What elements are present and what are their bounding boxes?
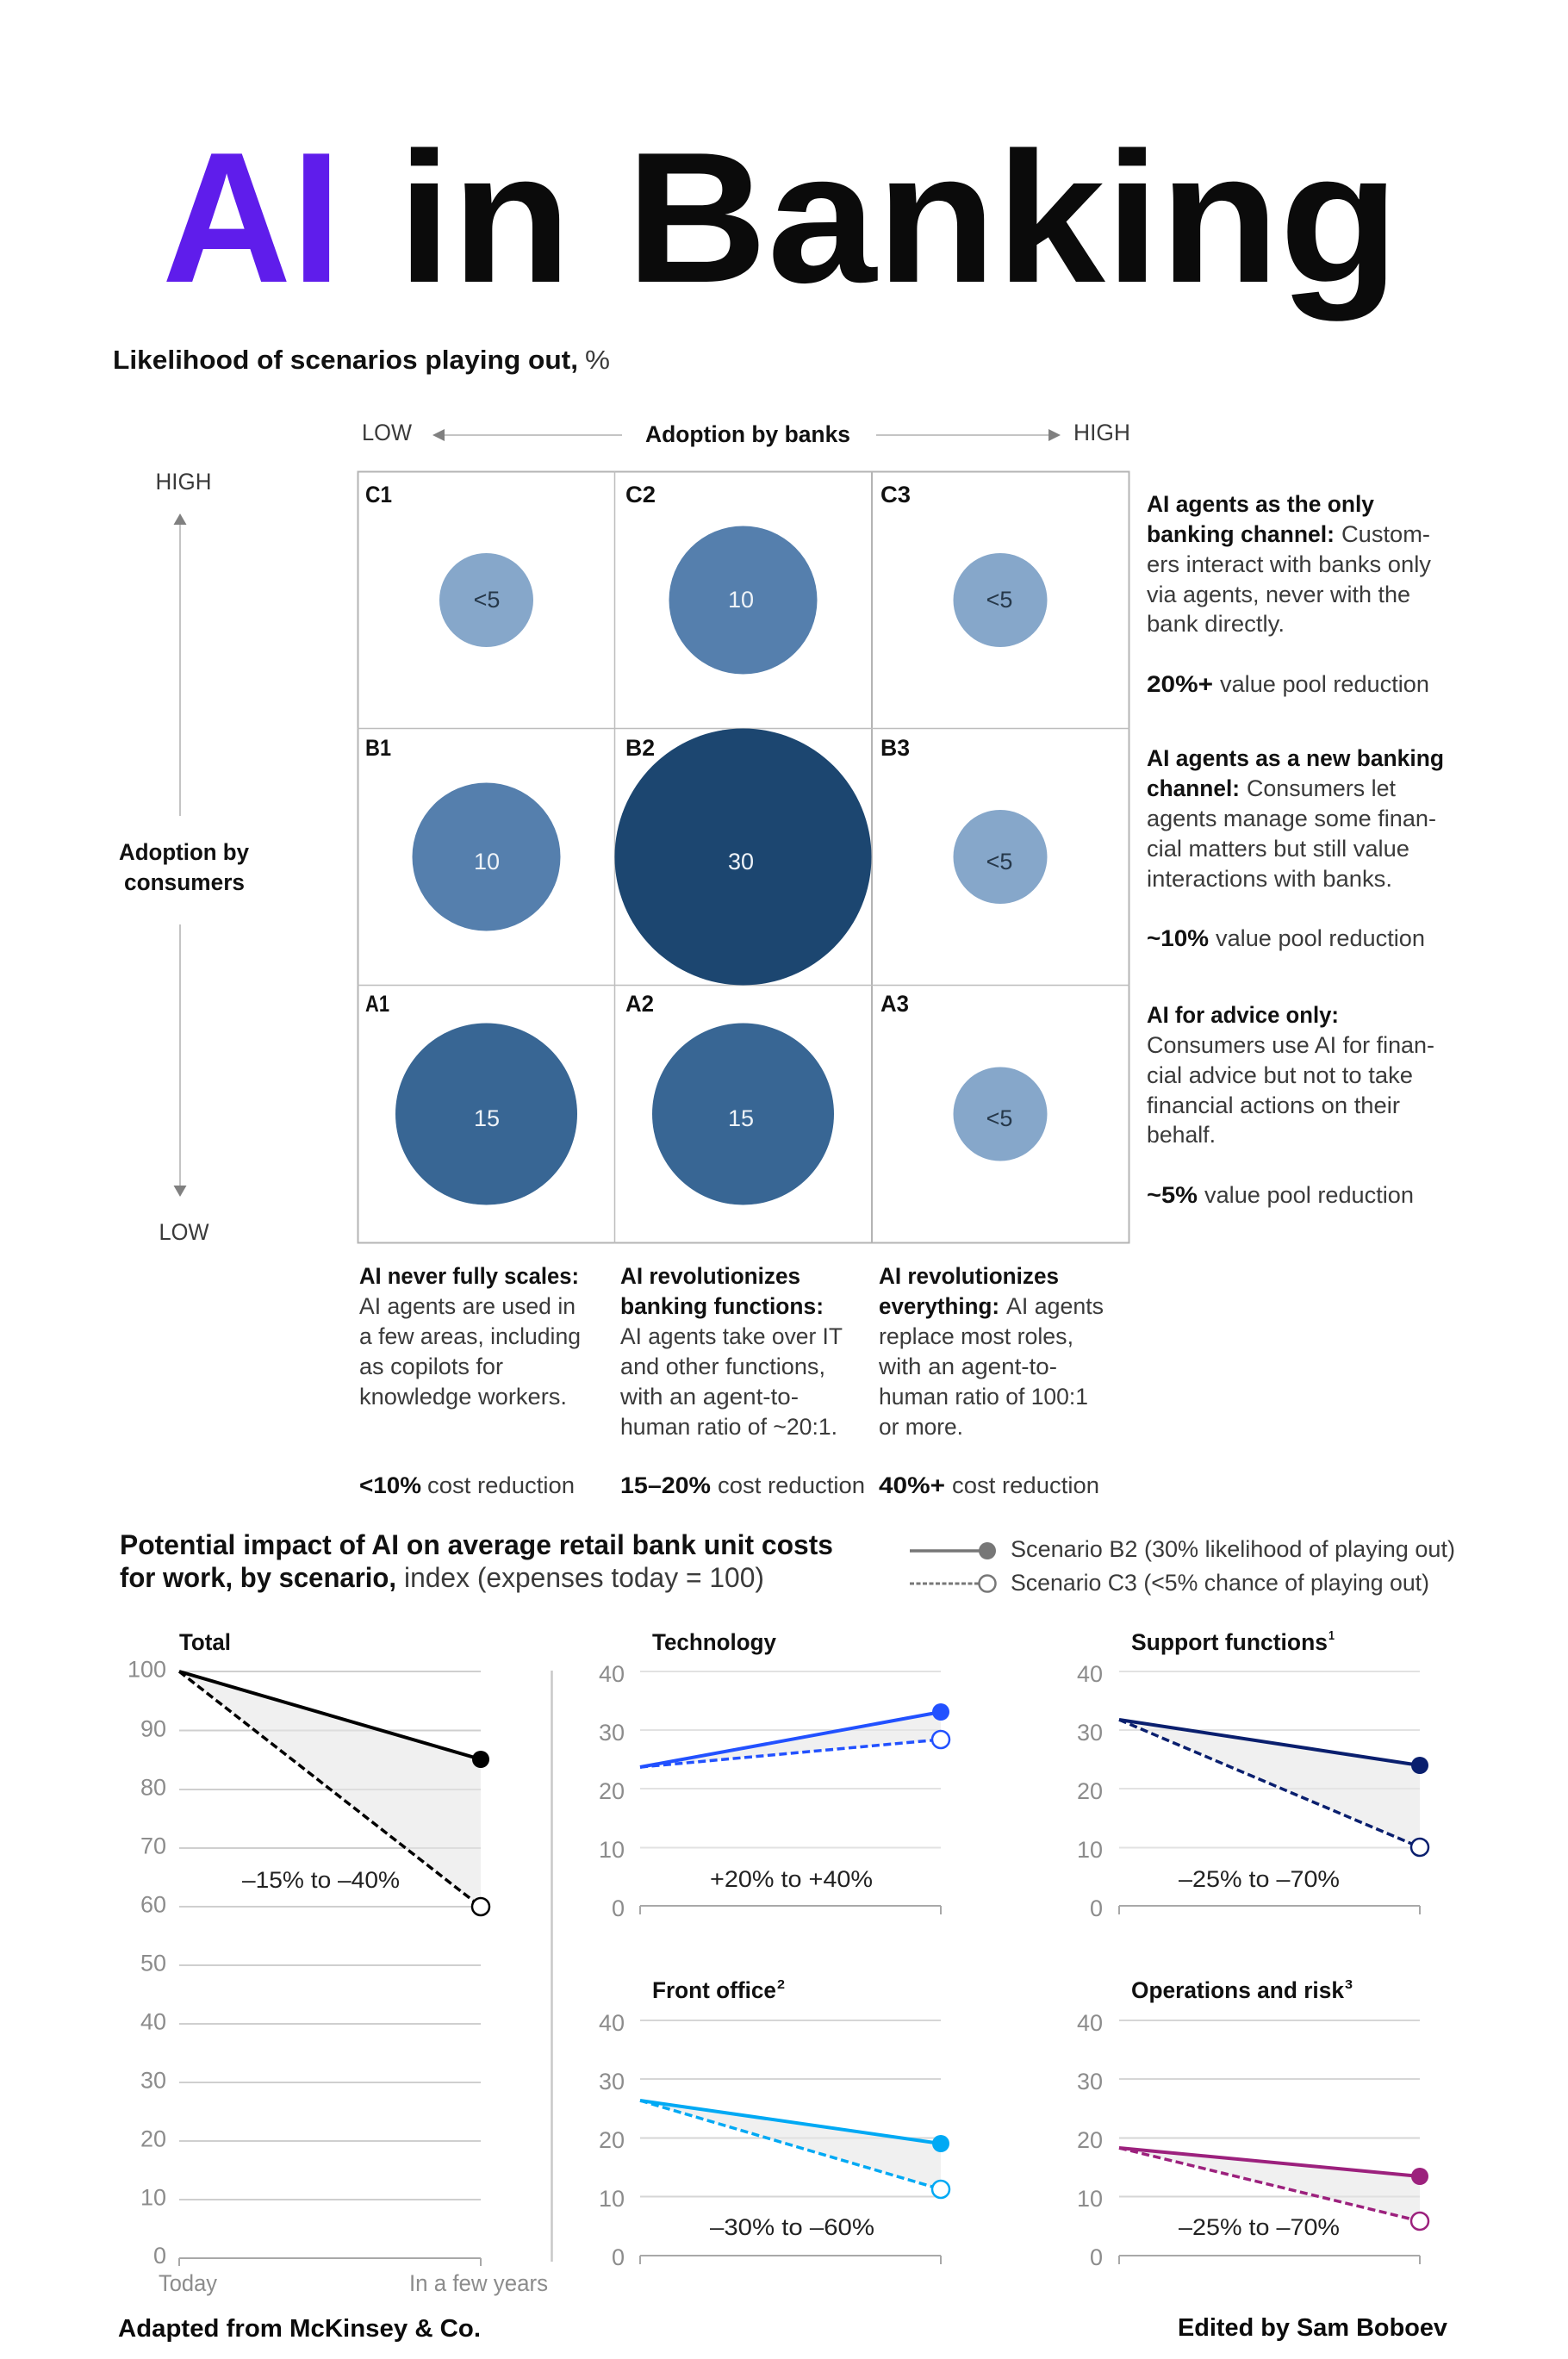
chart: total: 30 bbox=[140, 2068, 166, 2094]
text: AI revolutionizes banking functions: human ratio of ~20:1. bbox=[620, 1414, 837, 1440]
text: AI for advice only: value pool reduction bbox=[1204, 1182, 1414, 1208]
axis: adoption by banks: HIGH bbox=[1073, 420, 1130, 445]
chart: front office: Front office bbox=[652, 1977, 776, 2003]
chart: front office: 40 bbox=[599, 2010, 625, 2036]
cell A1 bbox=[365, 991, 577, 1204]
cell B1 bbox=[365, 735, 560, 931]
text: AI revolutionizes banking functions: AI agents take over IT bbox=[620, 1323, 843, 1349]
chart: front office: 2 bbox=[777, 1977, 785, 1992]
text: AI revolutionizes everything: or more. bbox=[879, 1414, 963, 1440]
text: agents as the only banking channel: Custom- bbox=[1341, 521, 1430, 547]
chart: total: 20 bbox=[140, 2126, 166, 2152]
chart: operations and risk: 0 bbox=[1090, 2244, 1103, 2270]
cell A3: A3 bbox=[880, 991, 909, 1017]
axis: adoption by consumers: consumers bbox=[124, 869, 245, 895]
text: agents as a new banking channel: ~10% bbox=[1147, 925, 1209, 951]
subtitle: likelihood of scenarios: Likelihood of scenarios playing out, bbox=[113, 345, 578, 375]
text: AI revolutionizes everything: everything: bbox=[879, 1293, 999, 1319]
text: AI revolutionizes everything bbox=[878, 1263, 1104, 1498]
text: agents as a new banking channel: interactions with banks. bbox=[1147, 866, 1392, 892]
text: AI for advice only: Consumers use AI for finan- bbox=[1147, 1032, 1434, 1058]
chart: operations and risk: Operations and risk bbox=[1131, 1977, 1345, 2003]
text: agents as a new banking channel: agents manage some finan- bbox=[1147, 806, 1436, 831]
cell A1: A1 bbox=[365, 991, 389, 1017]
cell B2: 30 bbox=[728, 849, 754, 875]
heading: potential impact: index (expenses today = 100) bbox=[404, 1562, 764, 1593]
chart: total: In a few years bbox=[409, 2270, 548, 2296]
axis: adoption by consumers bbox=[119, 469, 249, 1245]
cell C3: <5 bbox=[986, 587, 1012, 613]
text: AI for advice only: AI for advice only: bbox=[1147, 1002, 1339, 1028]
heading: potential impact: for work, by scenario, bbox=[120, 1562, 396, 1593]
text: AI never fully scales bbox=[359, 1263, 581, 1498]
chart: total: Today bbox=[159, 2270, 217, 2296]
axis: adoption by consumers: HIGH bbox=[155, 469, 212, 495]
text: agents as the only banking channel: value pool reduction bbox=[1220, 671, 1429, 697]
legend: Scenario C3 (<5% chance of playing out) bbox=[1011, 1570, 1429, 1596]
title: in Banking bbox=[397, 113, 1399, 321]
text: AI never fully scales: AI never fully scales: bbox=[359, 1263, 579, 1289]
text: agents as the only banking channel: banking channel: bbox=[1147, 521, 1335, 547]
text: agents as a new banking channel bbox=[1147, 745, 1444, 951]
text: agents as the only banking channel: via agents, never with the bbox=[1147, 582, 1410, 607]
cell B2: B2 bbox=[625, 735, 655, 761]
cell A3: <5 bbox=[986, 1105, 1012, 1131]
chart: operations and risk: 20 bbox=[1077, 2127, 1103, 2153]
axis: adoption by consumers: LOW bbox=[159, 1219, 209, 1245]
chart: operations and risk: 40 bbox=[1077, 2010, 1103, 2036]
text: AI for advice only: cial advice but not to take bbox=[1147, 1062, 1413, 1088]
text: agents as a new banking channel: Consumers let bbox=[1247, 775, 1396, 801]
cell A2: 15 bbox=[728, 1105, 754, 1131]
chart: operations and risk: 3 bbox=[1345, 1977, 1353, 1992]
text: AI revolutionizes everything: with an agent-to- bbox=[878, 1354, 1057, 1379]
chart: total bbox=[128, 1629, 548, 2296]
cell C3 bbox=[880, 482, 1048, 647]
text: AI never fully scales: knowledge workers. bbox=[359, 1384, 567, 1410]
cell C2 bbox=[625, 482, 817, 674]
axis: adoption by consumers: Adoption by bbox=[119, 839, 249, 865]
text: AI revolutionizes everything: replace most roles, bbox=[879, 1323, 1073, 1349]
cell B3: B3 bbox=[880, 735, 910, 761]
axis: adoption by banks: LOW bbox=[362, 420, 412, 445]
chart: support functions: 0 bbox=[1090, 1895, 1103, 1921]
cell B2 bbox=[615, 729, 872, 986]
chart: total: 40 bbox=[140, 2009, 166, 2035]
chart: total: 90 bbox=[140, 1716, 166, 1742]
chart: front office: 0 bbox=[612, 2244, 625, 2270]
text: AI for advice only: financial actions on their bbox=[1147, 1092, 1400, 1118]
chart: technology: 10 bbox=[599, 1837, 625, 1863]
chart: support functions: 30 bbox=[1077, 1720, 1103, 1746]
chart: technology: Technology bbox=[652, 1629, 776, 1655]
text: AI never fully scales: <10% bbox=[359, 1472, 421, 1498]
legend bbox=[910, 1536, 1455, 1596]
title: AI bbox=[162, 113, 341, 321]
text: agents as the only banking channel: bank directly. bbox=[1147, 611, 1285, 637]
cell A3 bbox=[880, 991, 1048, 1161]
cell A2: A2 bbox=[625, 991, 654, 1017]
chart: total: 70 bbox=[140, 1833, 166, 1859]
axis: adoption by banks: Adoption by banks bbox=[645, 421, 850, 447]
text: agents as a new banking channel: cial matters but still value bbox=[1147, 836, 1409, 862]
text: agents as a new banking channel: channel: bbox=[1147, 775, 1240, 801]
chart: operations and risk bbox=[1077, 1977, 1428, 2270]
chart: support functions: 10 bbox=[1077, 1837, 1103, 1863]
text: AI revolutionizes banking functions: with an agent-to- bbox=[619, 1384, 799, 1410]
chart: technology: +20% to +40% bbox=[710, 1866, 873, 1892]
chart: support functions: –25% to –70% bbox=[1179, 1866, 1340, 1892]
cell C1: C1 bbox=[365, 482, 392, 507]
cell A1: 15 bbox=[474, 1105, 500, 1131]
text: AI revolutionizes banking functions: AI revolutionizes bbox=[620, 1263, 800, 1289]
subtitle: likelihood of scenarios: % bbox=[585, 345, 610, 375]
text: agents as a new banking channel: AI agents as a new banking bbox=[1147, 745, 1444, 771]
text: agents as the only banking channel bbox=[1147, 491, 1431, 697]
text: agents as the only banking channel: 20%+ bbox=[1147, 671, 1213, 697]
chart: front office: 10 bbox=[599, 2186, 625, 2212]
chart: technology bbox=[599, 1629, 949, 1921]
cell C2: C2 bbox=[625, 482, 656, 507]
text: AI revolutionizes banking functions bbox=[619, 1263, 865, 1498]
chart: technology: 40 bbox=[599, 1661, 625, 1687]
text: AI revolutionizes banking functions: 15–20% bbox=[620, 1472, 711, 1498]
text: AI revolutionizes everything: AI revolutionizes bbox=[879, 1263, 1059, 1289]
text: AI for advice only: behalf. bbox=[1147, 1122, 1216, 1148]
scenario matrix bbox=[358, 471, 1129, 1243]
editor credit: Edited by Sam Boboev bbox=[1178, 2314, 1447, 2342]
axis: adoption by banks bbox=[362, 420, 1130, 447]
cell C1: <5 bbox=[474, 587, 500, 613]
text: AI never fully scales: as copilots for bbox=[359, 1354, 503, 1379]
cell A2 bbox=[625, 991, 834, 1204]
chart: total: 80 bbox=[140, 1775, 166, 1801]
chart: total: 60 bbox=[140, 1892, 166, 1918]
text: AI revolutionizes everything: AI agents bbox=[1006, 1293, 1104, 1319]
text: AI revolutionizes everything: 40%+ bbox=[879, 1472, 945, 1498]
text: agents as a new banking channel: value pool reduction bbox=[1216, 925, 1425, 951]
chart: operations and risk: 30 bbox=[1077, 2069, 1103, 2094]
chart: technology: 20 bbox=[599, 1778, 625, 1804]
text: AI revolutionizes everything: human ratio of 100:1 bbox=[879, 1384, 1088, 1410]
text: AI for advice only bbox=[1147, 1002, 1434, 1208]
chart: support functions: 20 bbox=[1077, 1778, 1103, 1804]
chart: front office: –30% to –60% bbox=[710, 2214, 874, 2240]
chart: operations and risk: 10 bbox=[1077, 2186, 1103, 2212]
text: AI revolutionizes banking functions: and other functions, bbox=[620, 1354, 825, 1379]
text: agents as the only banking channel: ers interact with banks only bbox=[1147, 551, 1431, 577]
source credit: Adapted from McKinsey & Co. bbox=[118, 2315, 481, 2343]
chart: front office: 30 bbox=[599, 2069, 625, 2094]
cell C1 bbox=[365, 482, 533, 647]
legend: Scenario B2 (30% likelihood of playing out) bbox=[1011, 1536, 1455, 1562]
text: AI revolutionizes everything: cost reduction bbox=[952, 1472, 1099, 1498]
text: AI never fully scales: AI agents are used in bbox=[359, 1293, 576, 1319]
chart: total: Total bbox=[179, 1629, 231, 1655]
cell B1: 10 bbox=[474, 849, 500, 875]
chart: front office bbox=[599, 1977, 949, 2270]
chart: front office: 20 bbox=[599, 2127, 625, 2153]
chart: technology: 30 bbox=[599, 1720, 625, 1746]
heading: potential impact: Potential impact of AI on average retail bank unit costs bbox=[120, 1529, 833, 1560]
chart: support functions: 1 bbox=[1328, 1628, 1335, 1643]
cell C2: 10 bbox=[728, 587, 754, 613]
chart: total: 100 bbox=[128, 1656, 166, 1682]
cell C3: C3 bbox=[880, 482, 911, 507]
text: AI revolutionizes banking functions: banking functions: bbox=[620, 1293, 824, 1319]
text: agents as the only banking channel: AI agents as the only bbox=[1147, 491, 1374, 517]
text: AI revolutionizes banking functions: cost reduction bbox=[718, 1472, 865, 1498]
chart: support functions: 40 bbox=[1077, 1661, 1103, 1687]
chart: total: 0 bbox=[153, 2243, 166, 2269]
divider between total and functions bbox=[551, 1671, 553, 2262]
cell B3: <5 bbox=[986, 849, 1012, 875]
chart: total: 50 bbox=[140, 1951, 166, 1976]
cell B3 bbox=[880, 735, 1048, 904]
cell B1: B1 bbox=[365, 735, 391, 761]
text: AI for advice only: ~5% bbox=[1147, 1182, 1198, 1208]
heading: potential impact bbox=[120, 1529, 833, 1593]
chart: technology: 0 bbox=[612, 1895, 625, 1921]
text: AI never fully scales: a few areas, including bbox=[359, 1323, 581, 1349]
chart: operations and risk: –25% to –70% bbox=[1179, 2214, 1340, 2240]
chart: total: –15% to –40% bbox=[242, 1867, 400, 1893]
text: AI never fully scales: cost reduction bbox=[427, 1472, 575, 1498]
chart: support functions bbox=[1077, 1628, 1428, 1921]
chart: total: 10 bbox=[140, 2185, 166, 2211]
chart: support functions: Support functions bbox=[1131, 1629, 1328, 1655]
